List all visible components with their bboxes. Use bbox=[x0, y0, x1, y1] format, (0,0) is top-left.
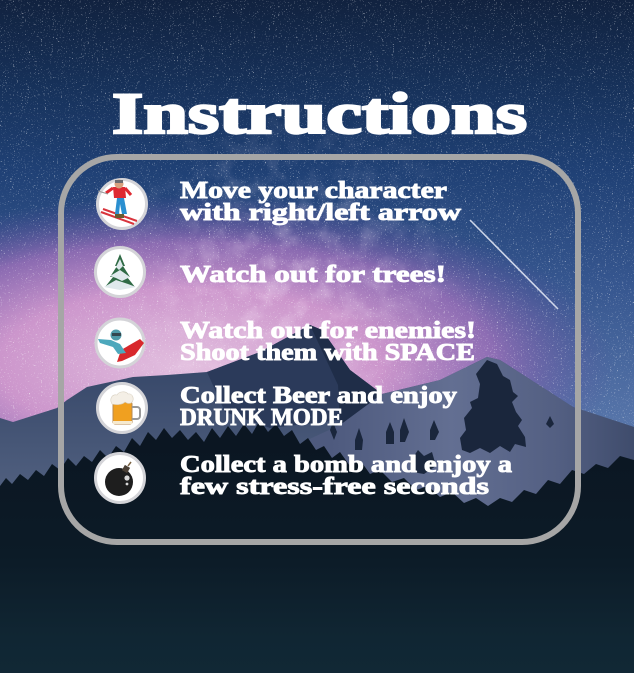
background: mountains bbox=[0, 325, 634, 520]
text: watch out for trees: Watch out for trees! bbox=[180, 262, 446, 288]
text: collect a bomb: Collect a bomb and enjoy a bbox=[180, 452, 512, 478]
shooting star bbox=[470, 220, 558, 309]
icon: skier bbox=[98, 180, 146, 228]
icon: snowy tree bbox=[96, 248, 144, 296]
text: watch out for enemies: Shoot them with SPACE bbox=[180, 340, 475, 366]
text: collect beer: Collect Beer and enjoy bbox=[180, 383, 457, 409]
text: collect beer: DRUNK MODE bbox=[180, 405, 343, 431]
background: pine forest bbox=[0, 420, 634, 673]
text: collect a bomb: few stress-free seconds bbox=[180, 474, 489, 500]
text: move your character: with right/left arrow bbox=[180, 200, 462, 226]
icon: snowboarder enemy bbox=[96, 319, 144, 367]
title: Instructions bbox=[112, 81, 527, 146]
icon: bomb bbox=[96, 454, 144, 502]
text: watch out for enemies: Watch out for enemies! bbox=[180, 318, 476, 344]
background: night sky bbox=[0, 0, 634, 427]
icon: beer mug bbox=[98, 384, 146, 432]
panel: instructions frame bbox=[61, 157, 578, 542]
text: move your character: Move your character bbox=[180, 178, 447, 204]
